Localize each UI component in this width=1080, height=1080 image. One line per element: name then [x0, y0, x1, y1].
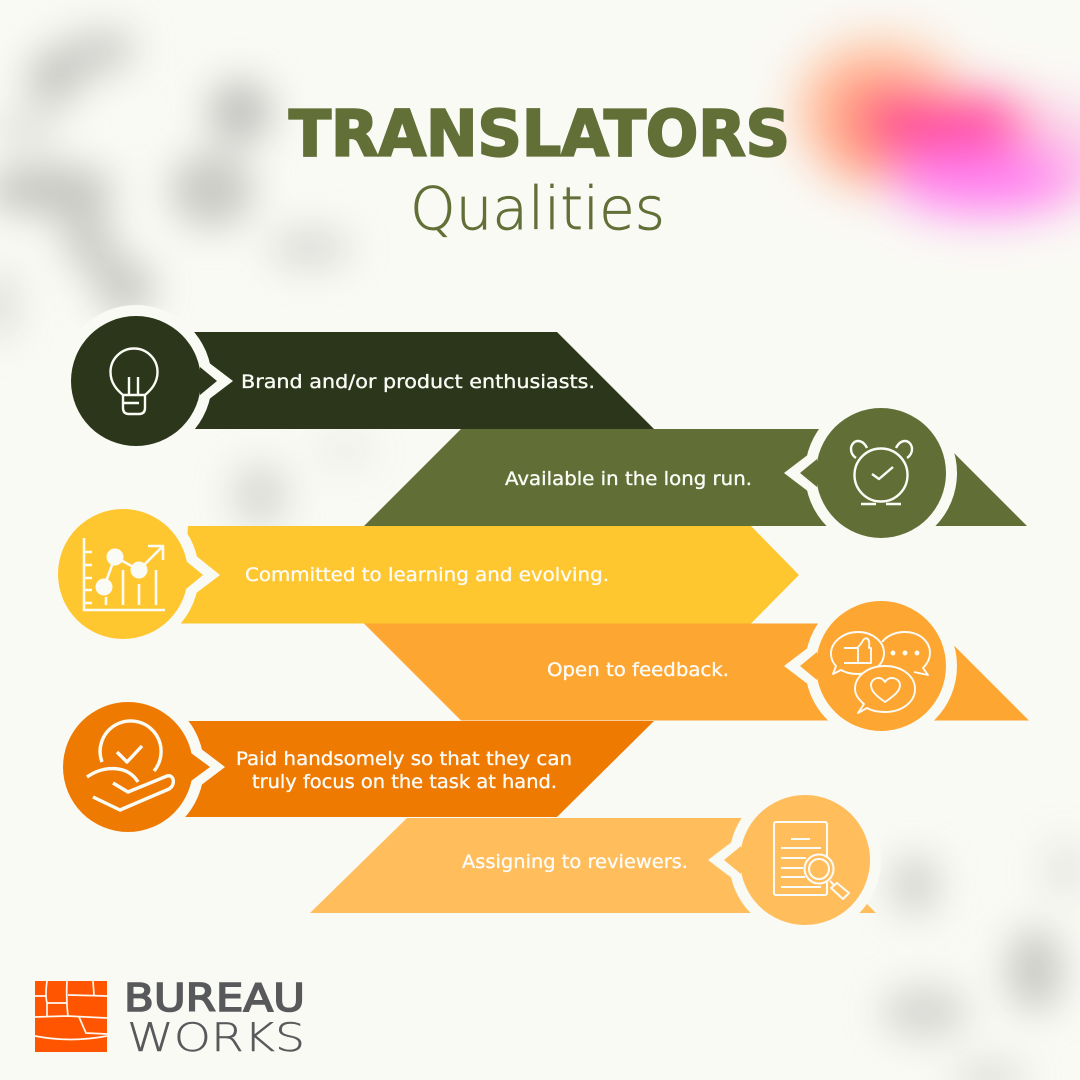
title [289, 98, 790, 243]
band 5: paid handsomely [185, 721, 654, 817]
band 3: committed to learning [181, 526, 799, 624]
subtitle: Qualities [410, 174, 665, 243]
title: TRANSLATORS [289, 98, 790, 170]
background: pink gradient glow [795, 38, 1080, 214]
icon: hand with check [87, 721, 173, 810]
band 1: brand enthusiasts [190, 332, 654, 429]
badge 4: feedback bubbles [784, 590, 957, 742]
icon: growth chart [84, 538, 165, 610]
icon: feedback bubbles [831, 632, 930, 713]
band 4: open to feedback: Open to feedback. [547, 659, 729, 681]
icon: alarm clock [851, 441, 912, 504]
icon: document with magnifier [774, 822, 849, 899]
badge 5: hand with check [52, 691, 225, 843]
logo mark [35, 981, 107, 1052]
band 5: paid handsomely: Paid handsomely so that they can [236, 748, 572, 770]
badge 3: growth chart [47, 498, 220, 650]
badge 1: light bulb [60, 305, 233, 457]
logo wordmark: BUREAU [124, 976, 305, 1020]
badge 2: alarm clock [784, 397, 957, 549]
logo: Bureau Works: WORKS [127, 1016, 305, 1061]
band 6: assigning to reviewers: Assigning to reviewers. [462, 851, 688, 873]
band 2: available in the long run: Available in the long run. [505, 468, 752, 490]
logo: Bureau Works [35, 976, 305, 1061]
band 6: assigning to reviewers [310, 818, 876, 913]
band 3: committed to learning: Committed to learning and evolving. [245, 564, 609, 586]
band 1: brand enthusiasts: Brand and/or product enthusiasts. [241, 371, 595, 393]
band 2: available in the long run [364, 429, 1027, 526]
band 4: open to feedback [364, 624, 1029, 720]
icon: light bulb [110, 348, 158, 414]
band 5: paid handsomely: truly focus on the task at hand. [252, 771, 557, 793]
badge 6: document with magnifier [708, 784, 881, 936]
